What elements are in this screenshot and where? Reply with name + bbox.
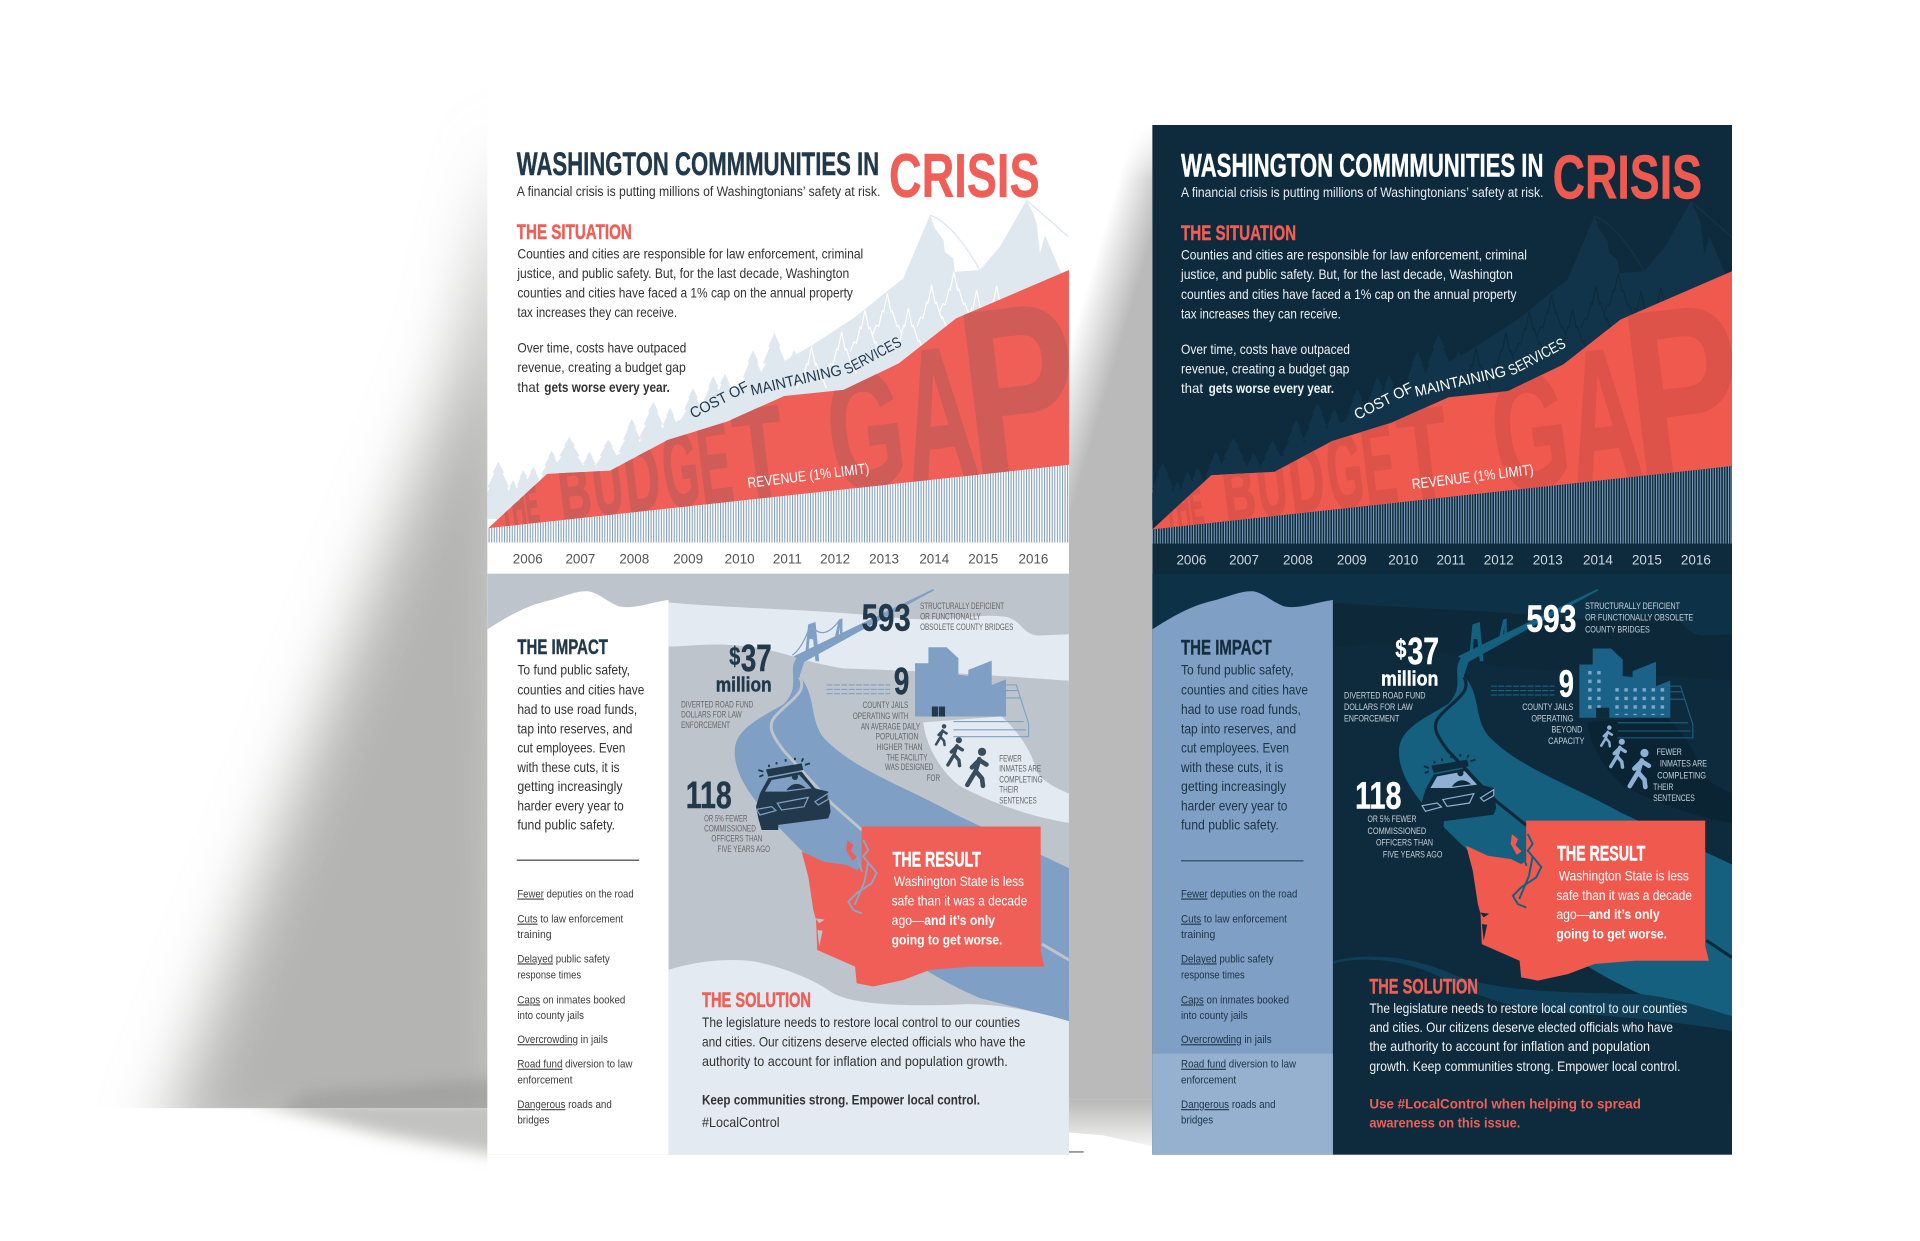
floor shadow bbox=[260, 1108, 488, 1162]
budget gap lettering: D bbox=[618, 423, 666, 533]
caption: fewer inmates: SENTENCES bbox=[1653, 793, 1695, 803]
title bbox=[516, 152, 1038, 199]
impact list bbox=[1181, 889, 1297, 1126]
lower background bbox=[487, 574, 1069, 1155]
icon: inmates bbox=[1601, 725, 1649, 787]
dark tree outlines bbox=[1461, 273, 1676, 389]
stat: 118: 118 bbox=[686, 775, 732, 817]
left column white blob bbox=[487, 591, 669, 1155]
the solution: THE SOLUTION bbox=[1369, 976, 1478, 999]
year axis: 2016 bbox=[1018, 551, 1048, 566]
budget gap lettering: A bbox=[1554, 307, 1651, 527]
impact list: into county jails bbox=[1181, 1010, 1248, 1022]
stat: 593: STRUCTURALLY DEFICIENT bbox=[1585, 601, 1680, 611]
the situation: tax increases they can receive. bbox=[1181, 305, 1341, 321]
impact list: Caps on inmates booked bbox=[1181, 994, 1289, 1006]
impact list: Dangerous roads and bbox=[517, 1099, 612, 1111]
budget gap lettering: THE bbox=[496, 475, 542, 537]
stat: $37 million: DOLLARS FOR LAW bbox=[1344, 702, 1413, 712]
stat: 118: OR 5% FEWER bbox=[704, 814, 747, 824]
stat: 9 jails: POPULATION bbox=[876, 732, 918, 742]
year axis bbox=[1176, 552, 1711, 567]
caption: fewer inmates: COMPLETING bbox=[1657, 770, 1706, 780]
solution background bbox=[1333, 956, 1732, 1155]
inmate path bbox=[1588, 716, 1732, 823]
divider bbox=[517, 860, 639, 861]
budget gap lettering: THE bbox=[1160, 476, 1207, 539]
year axis: 2015 bbox=[968, 551, 998, 566]
caption: fewer inmates: COMPLETING bbox=[999, 774, 1043, 784]
axis label: cost bbox=[1351, 335, 1569, 424]
stat: 9 jails: OPERATING bbox=[1531, 714, 1573, 724]
impact list: Caps on inmates booked bbox=[517, 994, 625, 1006]
impact list: training bbox=[1181, 929, 1215, 941]
caption: fewer inmates: THEIR bbox=[1653, 782, 1673, 792]
the situation: tax increases they can receive. bbox=[517, 304, 677, 320]
impact list: into county jails bbox=[517, 1010, 585, 1022]
stat: 593: OR FUNCTIONALLY OBSOLETE bbox=[1585, 613, 1693, 623]
the impact bbox=[517, 636, 645, 833]
result box text: THE RESULT bbox=[893, 849, 981, 872]
washington map bbox=[1466, 821, 1709, 981]
the impact: had to use road funds, bbox=[1181, 701, 1301, 717]
the solution: The legislature needs to restore local control to our counties bbox=[702, 1014, 1020, 1030]
result box text bbox=[892, 849, 1028, 947]
axis label: cost: MAINTAINING bbox=[749, 362, 843, 399]
the situation: Over time, costs have outpaced bbox=[1181, 341, 1350, 357]
year axis: 2011 bbox=[1437, 552, 1465, 567]
the solution: growth. Keep communities strong. Empower local control. bbox=[1369, 1058, 1680, 1074]
the solution: The legislature needs to restore local control to our counties bbox=[1369, 1000, 1687, 1016]
the solution: #LocalControl bbox=[702, 1114, 780, 1130]
result box text: Washington State is less bbox=[1559, 867, 1689, 883]
the situation: revenue, creating a budget gap bbox=[517, 359, 686, 375]
the situation: justice, and public safety. But, for the last decade, Washington bbox=[1180, 266, 1513, 282]
the solution: authority to account for inflation and population growth. bbox=[702, 1053, 1008, 1069]
stat: 118: OFFICERS THAN bbox=[1376, 838, 1433, 848]
gap shadow between posters bbox=[1069, 125, 1152, 1153]
result box text: going to get worse. bbox=[1556, 925, 1667, 941]
stat: 9 jails: 9 bbox=[1559, 664, 1574, 706]
the impact bbox=[1180, 636, 1308, 833]
road centre line bbox=[1435, 677, 1732, 958]
the impact: counties and cities have bbox=[517, 681, 645, 697]
stat: 9 jails: HIGHER THAN bbox=[877, 742, 922, 752]
budget gap lettering: G bbox=[817, 334, 915, 528]
year axis: 2010 bbox=[725, 551, 755, 566]
divider bbox=[1181, 860, 1303, 861]
caption: fewer inmates: INMATES ARE bbox=[999, 764, 1041, 774]
stat: $37 million bbox=[1344, 631, 1439, 724]
the situation: Counties and cities are responsible for law enforcement, criminal bbox=[517, 245, 863, 261]
the situation bbox=[516, 221, 863, 395]
budget gap lettering: T bbox=[726, 378, 793, 531]
year axis: 2016 bbox=[1681, 552, 1711, 567]
the solution: Keep communities strong. Empower local control. bbox=[702, 1091, 980, 1107]
impact list: training bbox=[517, 929, 552, 941]
caption: fewer inmates: FEWER bbox=[999, 754, 1022, 764]
the impact: harder every year to bbox=[1181, 798, 1288, 814]
the solution bbox=[1369, 976, 1687, 1130]
year axis: 2006 bbox=[513, 551, 543, 566]
the impact: tap into reserves, and bbox=[1181, 720, 1296, 736]
stat: 9 jails: 9 bbox=[894, 661, 909, 703]
white tree outlines bbox=[797, 272, 1011, 388]
the situation bbox=[1180, 222, 1527, 396]
year axis: 2007 bbox=[1229, 552, 1259, 567]
mountains bbox=[1260, 201, 1732, 468]
stat: 9 jails bbox=[1522, 664, 1585, 746]
impact list: Fewer deputies on the road bbox=[1181, 889, 1297, 901]
stat: 593: STRUCTURALLY DEFICIENT bbox=[920, 601, 1005, 611]
axis label: cost: COST OF bbox=[687, 378, 752, 422]
stat: 593 bbox=[1526, 599, 1693, 641]
budget gap lettering bbox=[1160, 252, 1757, 539]
stat: 118: COMMISSIONED bbox=[1368, 826, 1426, 836]
title: A financial crisis is putting millions of Washingtonians’ safety at risk. bbox=[517, 184, 880, 199]
the solution: and cities. Our citizens deserve elected officials who have the bbox=[702, 1034, 1026, 1050]
icon: fences bbox=[827, 685, 1029, 737]
impact list: Overcrowding in jails bbox=[517, 1034, 608, 1046]
result box text: safe than it was a decade bbox=[892, 893, 1028, 909]
icon: jail building bbox=[1579, 648, 1670, 718]
result box text: ago—and it’s only bbox=[1556, 906, 1660, 922]
impact list: Fewer deputies on the road bbox=[517, 889, 634, 901]
title bbox=[1181, 142, 1702, 212]
budget gap area bbox=[488, 270, 1069, 528]
the situation: THE SITUATION bbox=[517, 221, 632, 244]
title: CRISIS bbox=[1553, 142, 1702, 212]
the impact: with these cuts, it is bbox=[1180, 759, 1283, 775]
stat: 9 jails: AN AVERAGE DAILY bbox=[861, 721, 920, 731]
stat: $37 million: DIVERTED ROAD FUND bbox=[1344, 690, 1426, 700]
stat: $37 million: $ bbox=[1395, 636, 1406, 664]
budget gap lettering: B bbox=[1218, 450, 1260, 536]
the impact: fund public safety. bbox=[517, 817, 615, 833]
stat: $37 million: million bbox=[716, 675, 772, 697]
year axis: 2009 bbox=[1337, 552, 1367, 567]
stat: 593: 593 bbox=[862, 598, 911, 640]
axis label: revenue: REVENUE (1% LIMIT) bbox=[747, 461, 870, 492]
year axis: 2009 bbox=[673, 551, 703, 566]
budget gap lettering bbox=[504, 306, 1068, 526]
caption: fewer inmates: FEWER bbox=[1657, 747, 1682, 757]
budget gap lettering: U bbox=[1251, 439, 1292, 535]
icon: inmates bbox=[936, 724, 987, 786]
budget gap lettering: U bbox=[587, 437, 628, 533]
impact list: Delayed public safety bbox=[1181, 953, 1274, 965]
title: WASHINGTON COMMMUNITIES IN bbox=[517, 146, 879, 182]
the impact: with these cuts, it is bbox=[517, 759, 619, 775]
budget gap lettering: A bbox=[890, 306, 987, 526]
stat: $37 million: $ bbox=[729, 643, 740, 671]
impact list: response times bbox=[1181, 969, 1245, 981]
washington map bbox=[802, 827, 1044, 987]
year axis: 2008 bbox=[619, 551, 649, 566]
year axis: 2014 bbox=[1583, 552, 1613, 567]
trees bbox=[488, 333, 796, 519]
stat: 118: 118 bbox=[1355, 775, 1401, 817]
stat: 118: COMMISSIONED bbox=[704, 824, 756, 834]
the impact: had to use road funds, bbox=[517, 701, 637, 717]
result box text: THE RESULT bbox=[1557, 843, 1646, 866]
result box text: Washington State is less bbox=[894, 873, 1024, 889]
year axis: 2008 bbox=[1283, 552, 1313, 567]
mountains bbox=[488, 200, 1069, 528]
result box text: ago—and it’s only bbox=[892, 912, 995, 928]
stat: $37 million: 37 bbox=[1408, 631, 1439, 673]
year axis: 2014 bbox=[919, 551, 950, 566]
stat: 9 jails: BEYOND bbox=[1551, 725, 1582, 735]
impact list: Road fund diversion to law bbox=[517, 1059, 632, 1071]
the impact: harder every year to bbox=[517, 798, 624, 814]
budget gap lettering: B bbox=[554, 449, 596, 535]
axis label: cost: SERVICES bbox=[1506, 335, 1569, 379]
impact list: enforcement bbox=[1181, 1075, 1236, 1087]
budget gap lettering: P bbox=[946, 251, 1093, 526]
revenue stripes bbox=[1152, 466, 1732, 544]
the solution: the authority to account for inflation and population bbox=[1369, 1038, 1650, 1054]
stat: 9 jails: COUNTY JAILS bbox=[863, 700, 908, 710]
stat: 118 bbox=[1355, 775, 1443, 859]
the situation: revenue, creating a budget gap bbox=[1181, 360, 1350, 376]
lower background bbox=[1152, 574, 1732, 1156]
stat: 9 jails: OPERATING WITH bbox=[853, 711, 909, 721]
axis label: cost bbox=[690, 337, 902, 417]
title: CRISIS bbox=[889, 141, 1040, 211]
road bbox=[735, 658, 1069, 1021]
year axis: 2011 bbox=[773, 551, 802, 566]
the impact: getting increasingly bbox=[517, 778, 623, 794]
the impact: THE IMPACT bbox=[1181, 636, 1272, 659]
the situation: justice, and public safety. But, for the last decade, Washington bbox=[516, 265, 849, 281]
solution background bbox=[669, 960, 1069, 1155]
icon: bridge bbox=[1458, 589, 1599, 662]
stat: 118: OR 5% FEWER bbox=[1368, 814, 1416, 824]
year axis: 2012 bbox=[1484, 552, 1514, 567]
budget gap area bbox=[1152, 271, 1732, 529]
caption: fewer inmates bbox=[999, 754, 1043, 805]
icon: police car bbox=[1422, 754, 1496, 826]
axis label: revenue: REVENUE (1% LIMIT) bbox=[1411, 462, 1534, 493]
the situation: counties and cities have faced a 1% cap on the annual property bbox=[517, 285, 853, 301]
the impact: getting increasingly bbox=[1181, 778, 1286, 794]
panel: dark poster bbox=[1141, 125, 1757, 1156]
the solution: awareness on this issue. bbox=[1369, 1114, 1520, 1130]
impact list: enforcement bbox=[517, 1075, 572, 1087]
stat: 593: COUNTY BRIDGES bbox=[1585, 625, 1650, 635]
impact list: Delayed public safety bbox=[517, 953, 610, 965]
stat: 9 jails: WAS DESIGNED bbox=[885, 762, 933, 772]
caption: fewer inmates: THEIR bbox=[999, 785, 1018, 795]
axis label: cost: MAINTAINING bbox=[1413, 363, 1508, 401]
the solution: Use #LocalControl when helping to spread bbox=[1369, 1095, 1641, 1111]
the impact: cut employees. Even bbox=[517, 739, 625, 755]
result box text: safe than it was a decade bbox=[1556, 887, 1692, 903]
the impact: counties and cities have bbox=[1181, 681, 1308, 697]
revenue stripes bbox=[488, 465, 1069, 542]
stat: $37 million: 37 bbox=[741, 638, 772, 680]
result box text bbox=[1556, 843, 1692, 941]
budget gap lettering: G bbox=[1481, 335, 1579, 529]
stat: $37 million: ENFORCEMENT bbox=[1344, 714, 1400, 724]
the situation: that bbox=[517, 379, 540, 395]
stat: 593: OR FUNCTIONALLY bbox=[920, 611, 981, 621]
the impact: tap into reserves, and bbox=[517, 720, 632, 736]
inmate path bbox=[923, 716, 1069, 823]
stat: $37 million bbox=[681, 638, 772, 730]
year axis: 2007 bbox=[565, 551, 595, 566]
axis label: cost: COST OF bbox=[1351, 380, 1416, 424]
budget gap lettering: P bbox=[1611, 252, 1757, 527]
impact list bbox=[517, 889, 634, 1126]
road centre line bbox=[771, 677, 1069, 960]
panel: light poster bbox=[477, 125, 1093, 1155]
impact list: bridges bbox=[1181, 1114, 1214, 1126]
stat: $37 million: DOLLARS FOR LAW bbox=[681, 709, 742, 719]
the situation: gets worse every year. bbox=[1209, 380, 1334, 396]
caption: fewer inmates: INMATES ARE bbox=[1660, 759, 1707, 769]
the situation: gets worse every year. bbox=[544, 379, 670, 395]
the impact: To fund public safety, bbox=[517, 662, 630, 678]
caption: fewer inmates bbox=[1653, 747, 1707, 803]
caption: fewer inmates: SENTENCES bbox=[999, 795, 1037, 805]
impact list: Cuts to law enforcement bbox=[1181, 914, 1287, 926]
the situation: THE SITUATION bbox=[1181, 222, 1296, 245]
the impact: To fund public safety, bbox=[1181, 662, 1294, 678]
stat: 9 jails: FOR bbox=[927, 773, 940, 783]
icon: police car bbox=[756, 758, 831, 830]
budget gap lettering: T bbox=[1391, 379, 1457, 532]
year axis: 2012 bbox=[820, 551, 850, 566]
stat: 118: FIVE YEARS AGO bbox=[718, 844, 770, 854]
stat: $37 million: DIVERTED ROAD FUND bbox=[681, 699, 753, 709]
budget gap lettering: D bbox=[1282, 424, 1330, 534]
stat: $37 million: million bbox=[1381, 669, 1438, 691]
the solution: THE SOLUTION bbox=[702, 989, 811, 1012]
year axis: 2013 bbox=[1533, 552, 1563, 567]
the situation: Over time, costs have outpaced bbox=[517, 340, 686, 356]
road bbox=[1399, 658, 1732, 1016]
stat: 118: OFFICERS THAN bbox=[711, 834, 762, 844]
stat: 593: 593 bbox=[1526, 599, 1577, 641]
stat: 9 jails: CAPACITY bbox=[1548, 736, 1585, 746]
impact list: Road fund diversion to law bbox=[1181, 1059, 1296, 1071]
year axis: 2013 bbox=[869, 551, 899, 566]
icon: bridge bbox=[792, 589, 934, 662]
budget gap lettering: E bbox=[690, 395, 739, 529]
stat: $37 million: ENFORCEMENT bbox=[681, 720, 730, 730]
the impact: fund public safety. bbox=[1181, 817, 1279, 833]
trees bbox=[1152, 334, 1460, 520]
stat: 9 jails: COUNTY JAILS bbox=[1522, 702, 1573, 712]
title: WASHINGTON COMMMUNITIES IN bbox=[1181, 147, 1543, 183]
icon: fences bbox=[1491, 686, 1693, 738]
the situation: counties and cities have faced a 1% cap on the annual property bbox=[1181, 286, 1517, 302]
year axis: 2006 bbox=[1176, 552, 1206, 567]
result box text: going to get worse. bbox=[892, 931, 1002, 947]
impact list: Overcrowding in jails bbox=[1181, 1034, 1272, 1046]
stat: 593: OBSOLETE COUNTY BRIDGES bbox=[920, 622, 1013, 632]
impact list: Dangerous roads and bbox=[1181, 1099, 1276, 1111]
stat: 593 bbox=[862, 602, 1014, 632]
stat: 9 jails: THE FACILITY bbox=[887, 752, 927, 762]
impact list: response times bbox=[517, 969, 581, 981]
budget gap lettering: E bbox=[1354, 396, 1403, 531]
budget gap lettering: G bbox=[655, 407, 705, 531]
stat: 9 jails bbox=[853, 661, 940, 783]
budget gap lettering: G bbox=[1320, 408, 1370, 532]
impact list: Cuts to law enforcement bbox=[517, 914, 623, 926]
impact list: bridges bbox=[517, 1114, 550, 1126]
the situation: Counties and cities are responsible for law enforcement, criminal bbox=[1181, 247, 1527, 263]
title: A financial crisis is putting millions of Washingtonians’ safety at risk. bbox=[1181, 185, 1543, 200]
wall shadow behind the light poster bbox=[138, 174, 488, 1108]
the impact: cut employees. Even bbox=[1181, 739, 1289, 755]
the solution: and cities. Our citizens deserve elected officials who have bbox=[1369, 1019, 1673, 1035]
icon: jail building bbox=[915, 647, 1006, 717]
left column blue blob bbox=[1152, 591, 1333, 1155]
the solution bbox=[702, 989, 1026, 1130]
year axis: 2015 bbox=[1632, 552, 1662, 567]
the situation: that bbox=[1181, 380, 1203, 396]
year axis: 2010 bbox=[1388, 552, 1418, 567]
stat: 118: FIVE YEARS AGO bbox=[1383, 849, 1443, 859]
stat: 118 bbox=[687, 781, 770, 852]
year axis bbox=[513, 554, 1048, 564]
the impact: THE IMPACT bbox=[517, 636, 608, 659]
axis label: cost: SERVICES bbox=[841, 334, 904, 378]
